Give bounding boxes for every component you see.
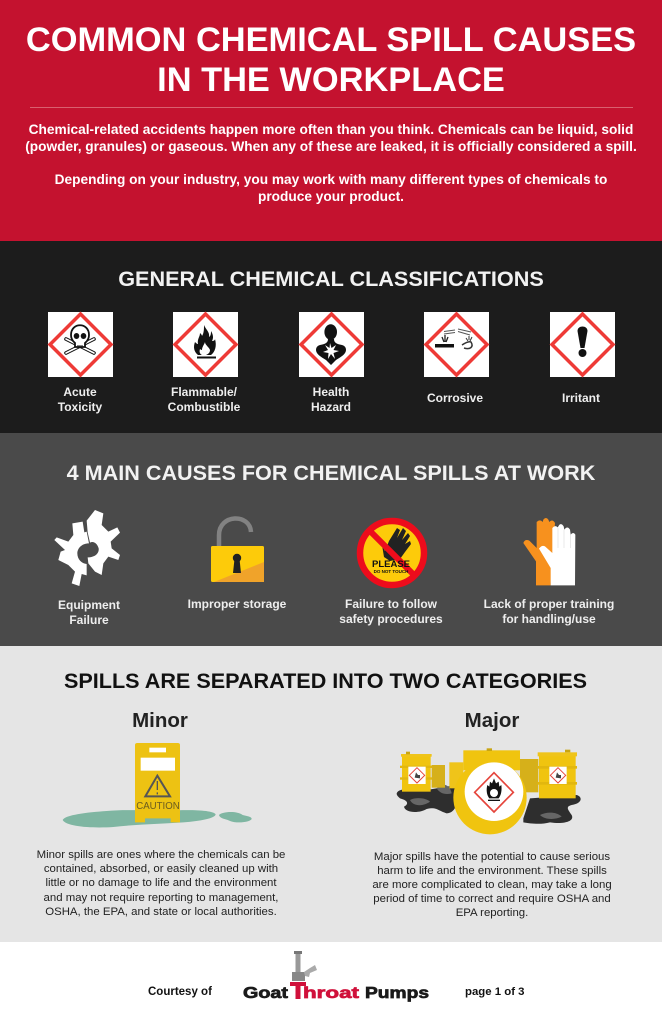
illustration: caution sign with spill: CAUTION <box>136 801 180 812</box>
label: acute toxicity <box>58 385 102 414</box>
text: major description: EPA reporting. <box>456 907 528 919</box>
label: failure to follow <box>339 597 443 626</box>
title <box>26 21 636 98</box>
text: major description: Major spills have the potential to cause serious <box>374 851 610 863</box>
label: lack of training: Lack of proper training <box>484 597 614 611</box>
text: minor description <box>37 849 285 918</box>
label: failure to follow: Failure to follow <box>345 597 437 611</box>
label: flammable <box>168 385 240 414</box>
text: minor description: Minor spills are ones where the chemicals can be <box>37 849 285 861</box>
label: equipment failure: Failure <box>69 613 109 627</box>
logo: Goat Throat Pumps: Pumps <box>365 985 429 1002</box>
label: lack of training <box>484 597 614 626</box>
intro text: (powder, granules) or gaseous. When any of these are leaked, it is officially considered a spill. <box>25 139 637 154</box>
label: flammable: Flammable/ <box>171 385 237 399</box>
icon: do not touch sign: PLEASE <box>372 559 410 570</box>
label: acute toxicity: Acute <box>63 385 97 399</box>
illustration: leaking barrels <box>396 748 581 834</box>
text: page number: page 1 of 3 <box>465 986 525 998</box>
icon: health hazard <box>298 312 364 378</box>
heading: classifications: GENERAL CHEMICAL CLASSIFICATIONS <box>118 266 544 291</box>
title: IN THE WORKPLACE <box>157 60 505 98</box>
icon: broken gear <box>54 510 120 586</box>
text: major description: harm to life and the environment. These spills <box>377 865 607 877</box>
text: major description: period of time to correct and require OSHA and <box>373 893 611 905</box>
panel: red header <box>0 0 662 241</box>
label: lack of training: for handling/use <box>502 612 596 626</box>
label: health hazard <box>311 385 351 414</box>
logo: Goat Throat Pumps <box>243 951 429 1002</box>
intro text: Depending on your industry, you may work with many different types of chemicals to <box>55 172 607 187</box>
text: minor description: little or no damage to life and the environment <box>45 877 277 889</box>
intro text: Chemical-related accidents happen more often than you think. Chemicals can be liquid, solid <box>29 122 633 137</box>
icon: corrosive <box>424 312 490 378</box>
panel: spill categories <box>0 646 662 942</box>
icon: do not touch sign: DO NOT TOUCH <box>374 569 408 574</box>
icon: gloves <box>523 518 576 586</box>
label: acute toxicity: Toxicity <box>58 400 102 414</box>
label: health hazard: Health <box>313 385 349 399</box>
heading: major: Major <box>465 709 519 732</box>
text: major description <box>372 851 612 919</box>
logo: Goat Throat Pumps: hroat <box>303 985 360 1002</box>
panel: footer <box>0 942 662 1024</box>
text: minor description: OSHA, the EPA, and state or local authorities. <box>45 906 277 918</box>
label: flammable: Combustible <box>168 400 240 414</box>
logo: Goat Throat Pumps: Goat <box>243 985 289 1002</box>
title: COMMON CHEMICAL SPILL CAUSES <box>26 21 636 59</box>
illustration: caution sign with spill <box>62 743 252 828</box>
icon: acute toxicity <box>48 312 114 378</box>
heading: causes: 4 MAIN CAUSES FOR CHEMICAL SPILLS AT WORK <box>67 460 595 485</box>
label: corrosive: Corrosive <box>427 391 483 405</box>
label: irritant: Irritant <box>562 391 600 405</box>
panel: general chemical classifications <box>0 241 662 433</box>
label: failure to follow: safety procedures <box>339 612 443 626</box>
intro text <box>25 122 637 204</box>
heading: minor: Minor <box>132 709 188 732</box>
icon: do not touch sign <box>356 518 428 588</box>
text: minor description: contained, absorbed, or easily cleaned up with <box>44 863 278 875</box>
label: health hazard: Hazard <box>311 400 351 414</box>
text: courtesy: Courtesy of <box>148 986 212 998</box>
text: major description: are more complicated to clean, may take a long <box>372 879 612 891</box>
heading: categories: SPILLS ARE SEPARATED INTO TWO CATEGORIES <box>64 668 587 693</box>
icon: irritant <box>550 312 616 378</box>
icon: flammable <box>172 312 238 378</box>
label: improper storage: Improper storage <box>188 597 286 611</box>
text: minor description: and may not require reporting to management, <box>44 892 278 904</box>
label: equipment failure <box>58 598 120 627</box>
icon: open padlock <box>211 516 264 582</box>
intro text: produce your product. <box>258 189 404 204</box>
panel: main causes <box>0 433 662 646</box>
label: equipment failure: Equipment <box>58 598 120 612</box>
